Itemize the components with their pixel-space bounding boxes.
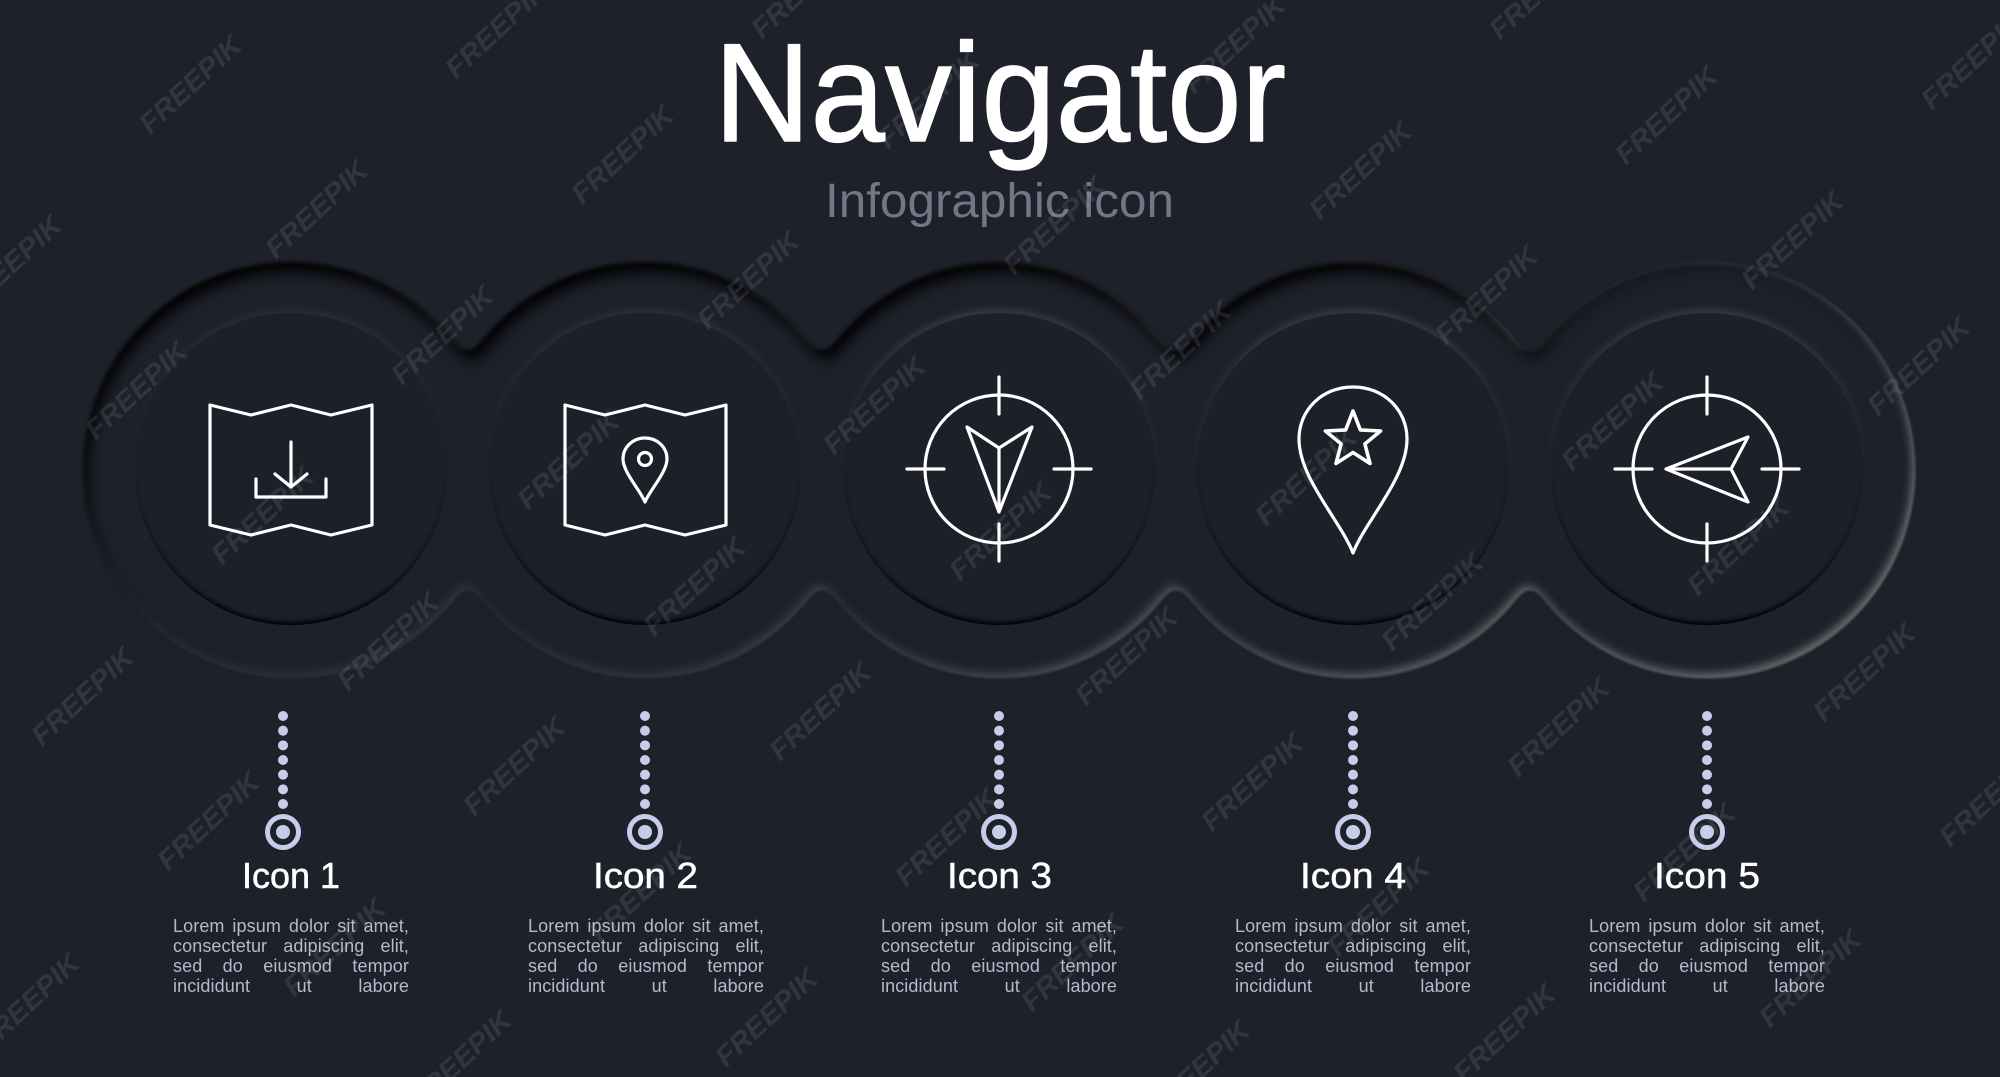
disc 1 shadow (142, 512, 441, 625)
watermark pattern: FREEPIK (259, 153, 375, 264)
watermark pattern: FREEPIK (1807, 616, 1923, 727)
disc 1 (135, 313, 447, 625)
panel: Icon 5 (1551, 313, 1863, 1000)
text block 2: incididunt ut labore (528, 976, 764, 996)
title: Navigator (714, 14, 1286, 171)
watermark pattern: FREEPIK (1303, 114, 1419, 225)
watermark pattern: FREEPIK (583, 836, 699, 947)
watermark pattern: FREEPIK (763, 655, 879, 766)
watermark pattern: FREEPIK (1555, 365, 1671, 476)
icon: compass crosshair with arrow pointing down (907, 377, 1091, 561)
watermark pattern: FREEPIK (889, 781, 1005, 892)
disc 2 (489, 313, 801, 625)
watermark pattern: FREEPIK (1123, 294, 1239, 405)
text block 5: consectetur adipiscing elit, (1589, 936, 1825, 956)
text block 3: Lorem ipsum dolor sit amet, (881, 916, 1117, 936)
text block 5: sed do eiusmod tempor (1589, 956, 1825, 976)
watermark pattern: FREEPIK (565, 98, 681, 209)
watermark pattern: FREEPIK (205, 459, 321, 570)
dotted connector 2 (640, 716, 650, 805)
heading: Icon 1: Icon 1 (242, 855, 340, 896)
icon: folded map with download arrow (210, 405, 372, 535)
watermark pattern: FREEPIK (1429, 239, 1545, 350)
watermark pattern: FREEPIK (871, 43, 987, 154)
text block 3: sed do eiusmod tempor (881, 956, 1117, 976)
text block 1: incididunt ut labore (173, 976, 409, 996)
watermark pattern: FREEPIK (1753, 922, 1869, 1033)
watermark pattern: FREEPIK (637, 530, 753, 641)
dotted connector 5 (1702, 716, 1712, 805)
watermark pattern: FREEPIK (385, 279, 501, 390)
text block 1: Lorem ipsum dolor sit amet, (173, 916, 409, 936)
heading: Icon 2: Icon 2 (593, 855, 698, 896)
icon: compass crosshair with arrow pointing left (1615, 377, 1799, 561)
watermark pattern: FREEPIK (1375, 545, 1491, 656)
panel: connected neumorphic groove (84, 263, 1914, 677)
text block 1: sed do eiusmod tempor (173, 956, 409, 976)
watermark pattern: FREEPIK (1195, 726, 1311, 837)
watermark pattern: FREEPIK (331, 585, 447, 696)
watermark pattern: FREEPIK (817, 349, 933, 460)
text block 4: incididunt ut labore (1235, 976, 1471, 996)
text block 5: incididunt ut labore (1589, 976, 1825, 996)
text block 1: consectetur adipiscing elit, (173, 936, 409, 956)
watermark pattern: FREEPIK (691, 224, 807, 335)
panel: Icon 1 (135, 313, 447, 1000)
text block 4 (1235, 916, 1472, 1000)
text block 3 (881, 916, 1118, 1000)
watermark pattern: FREEPIK (1609, 59, 1725, 170)
watermark pattern: FREEPIK (79, 334, 195, 445)
icon: location pin with star (1299, 387, 1407, 553)
text block 5 (1589, 916, 1826, 1000)
text block 4: sed do eiusmod tempor (1235, 956, 1471, 976)
dotted connector 4 (1348, 716, 1358, 805)
target marker 3 (984, 816, 1014, 848)
panel: Icon 3 (843, 313, 1155, 1000)
disc 3 shadow (850, 512, 1149, 625)
disc 4 (1197, 313, 1509, 625)
panel: Icon 2 (489, 313, 801, 1000)
watermark pattern: FREEPIK (943, 475, 1059, 586)
watermark pattern: FREEPIK (1861, 310, 1977, 421)
watermark pattern: FREEPIK (25, 640, 141, 751)
watermark pattern: FREEPIK (1735, 184, 1851, 295)
dotted connector 3 (994, 716, 1004, 805)
heading: Icon 5: Icon 5 (1654, 855, 1760, 896)
heading: Icon 3: Icon 3 (947, 855, 1052, 896)
watermark pattern: FREEPIK (1681, 490, 1797, 601)
watermark pattern: FREEPIK (1627, 796, 1743, 907)
disc 2 shadow (496, 512, 795, 625)
watermark pattern: FREEPIK (997, 169, 1113, 280)
text block 3: incididunt ut labore (881, 976, 1117, 996)
watermark pattern: FREEPIK (511, 404, 627, 515)
heading: Icon 4: Icon 4 (1300, 855, 1406, 896)
text block 1 (173, 916, 410, 1000)
disc 5 (1551, 313, 1863, 625)
text block 2: Lorem ipsum dolor sit amet, (528, 916, 764, 936)
target marker 1 (268, 816, 298, 848)
target marker 4 (1338, 816, 1368, 848)
watermark pattern: FREEPIK (1501, 671, 1617, 782)
text block 3: consectetur adipiscing elit, (881, 936, 1117, 956)
text block 2 (528, 916, 765, 1000)
target marker 2 (630, 816, 660, 848)
watermark pattern: FREEPIK (133, 28, 249, 139)
disc 3 (843, 313, 1155, 625)
watermark pattern: FREEPIK (1249, 420, 1365, 531)
text block 4: consectetur adipiscing elit, (1235, 936, 1471, 956)
dotted connector 1 (278, 716, 288, 805)
subtitle: Infographic icon (825, 175, 1174, 228)
watermark pattern: FREEPIK (1321, 851, 1437, 962)
text block 5: Lorem ipsum dolor sit amet, (1589, 916, 1825, 936)
watermark pattern: FREEPIK (1069, 600, 1185, 711)
text block 2: consectetur adipiscing elit, (528, 936, 764, 956)
disc 4 shadow (1204, 512, 1503, 625)
icon: folded map with location pin (565, 405, 726, 535)
watermark pattern: FREEPIK (277, 891, 393, 1002)
text block 4: Lorem ipsum dolor sit amet, (1235, 916, 1471, 936)
panel: Icon 4 (1197, 313, 1509, 1000)
disc 5 shadow (1558, 512, 1857, 625)
text block 2: sed do eiusmod tempor (528, 956, 764, 976)
watermark pattern: FREEPIK (151, 765, 267, 876)
target marker 5 (1692, 816, 1722, 848)
watermark pattern: FREEPIK (709, 961, 825, 1072)
watermark pattern: FREEPIK (1015, 906, 1131, 1017)
watermark pattern: FREEPIK (457, 710, 573, 821)
